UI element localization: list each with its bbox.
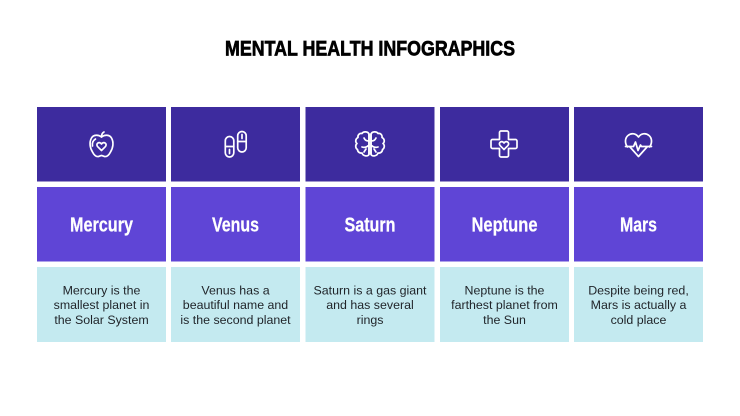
- icon panel: Saturn: [306, 107, 434, 182]
- icon panel: Neptune: [440, 107, 569, 182]
- column: Saturn: [306, 107, 434, 342]
- icon: brain: [356, 132, 384, 156]
- title: MENTAL HEALTH INFOGRAPHICS: [225, 36, 515, 60]
- description: Venus: Venus has a: [201, 284, 270, 298]
- description: Mars: Mars is actually a: [591, 298, 686, 312]
- description panel: Venus: [171, 267, 300, 342]
- name panel: Saturn: [306, 187, 434, 262]
- icon panel: Venus: [171, 107, 300, 182]
- heading: Venus: Venus: [212, 214, 259, 236]
- description: Venus: is the second planet: [180, 313, 291, 327]
- name panel: Mars: [574, 187, 703, 262]
- heading: Mars: Mars: [620, 214, 657, 236]
- name panel: Mercury: [37, 187, 166, 262]
- icon: heart with pulse: [625, 134, 652, 156]
- icon panel: Mars: [574, 107, 703, 182]
- icon: pills: [225, 132, 246, 157]
- description panel: Saturn: [306, 267, 434, 342]
- description panel: Mars: [574, 267, 703, 342]
- description panel: Neptune: [440, 267, 569, 342]
- description: Saturn: Saturn is a gas giant: [314, 284, 427, 298]
- icon panel: Mercury: [37, 107, 166, 182]
- description: Mars: Despite being red,: [588, 284, 689, 298]
- heading: Saturn: Saturn: [344, 214, 396, 236]
- description: Saturn: and has several: [326, 298, 414, 312]
- icon: medical cross with heart: [491, 131, 517, 157]
- icon: apple with heart: [90, 132, 113, 157]
- name panel: Neptune: [440, 187, 569, 262]
- column: Neptune: [440, 107, 569, 342]
- description: Neptune: Neptune is the: [465, 284, 545, 298]
- column: Mercury: [37, 107, 166, 342]
- description: Mars: cold place: [611, 313, 667, 327]
- description: Mercury: smallest planet in: [54, 298, 149, 312]
- description: Mercury: Mercury is the: [63, 284, 141, 298]
- description: Neptune: the Sun: [483, 313, 526, 327]
- heading: Mercury: Mercury: [70, 214, 134, 236]
- description: Neptune: farthest planet from: [451, 298, 558, 312]
- heading: Neptune: Neptune: [472, 214, 538, 236]
- column: Mars: [574, 107, 703, 342]
- column: Venus: [171, 107, 300, 342]
- description panel: Mercury: [37, 267, 166, 342]
- name panel: Venus: [171, 187, 300, 262]
- description: Saturn: rings: [357, 313, 383, 327]
- description: Mercury: the Solar System: [54, 313, 149, 327]
- description: Venus: beautiful name and: [183, 298, 288, 312]
